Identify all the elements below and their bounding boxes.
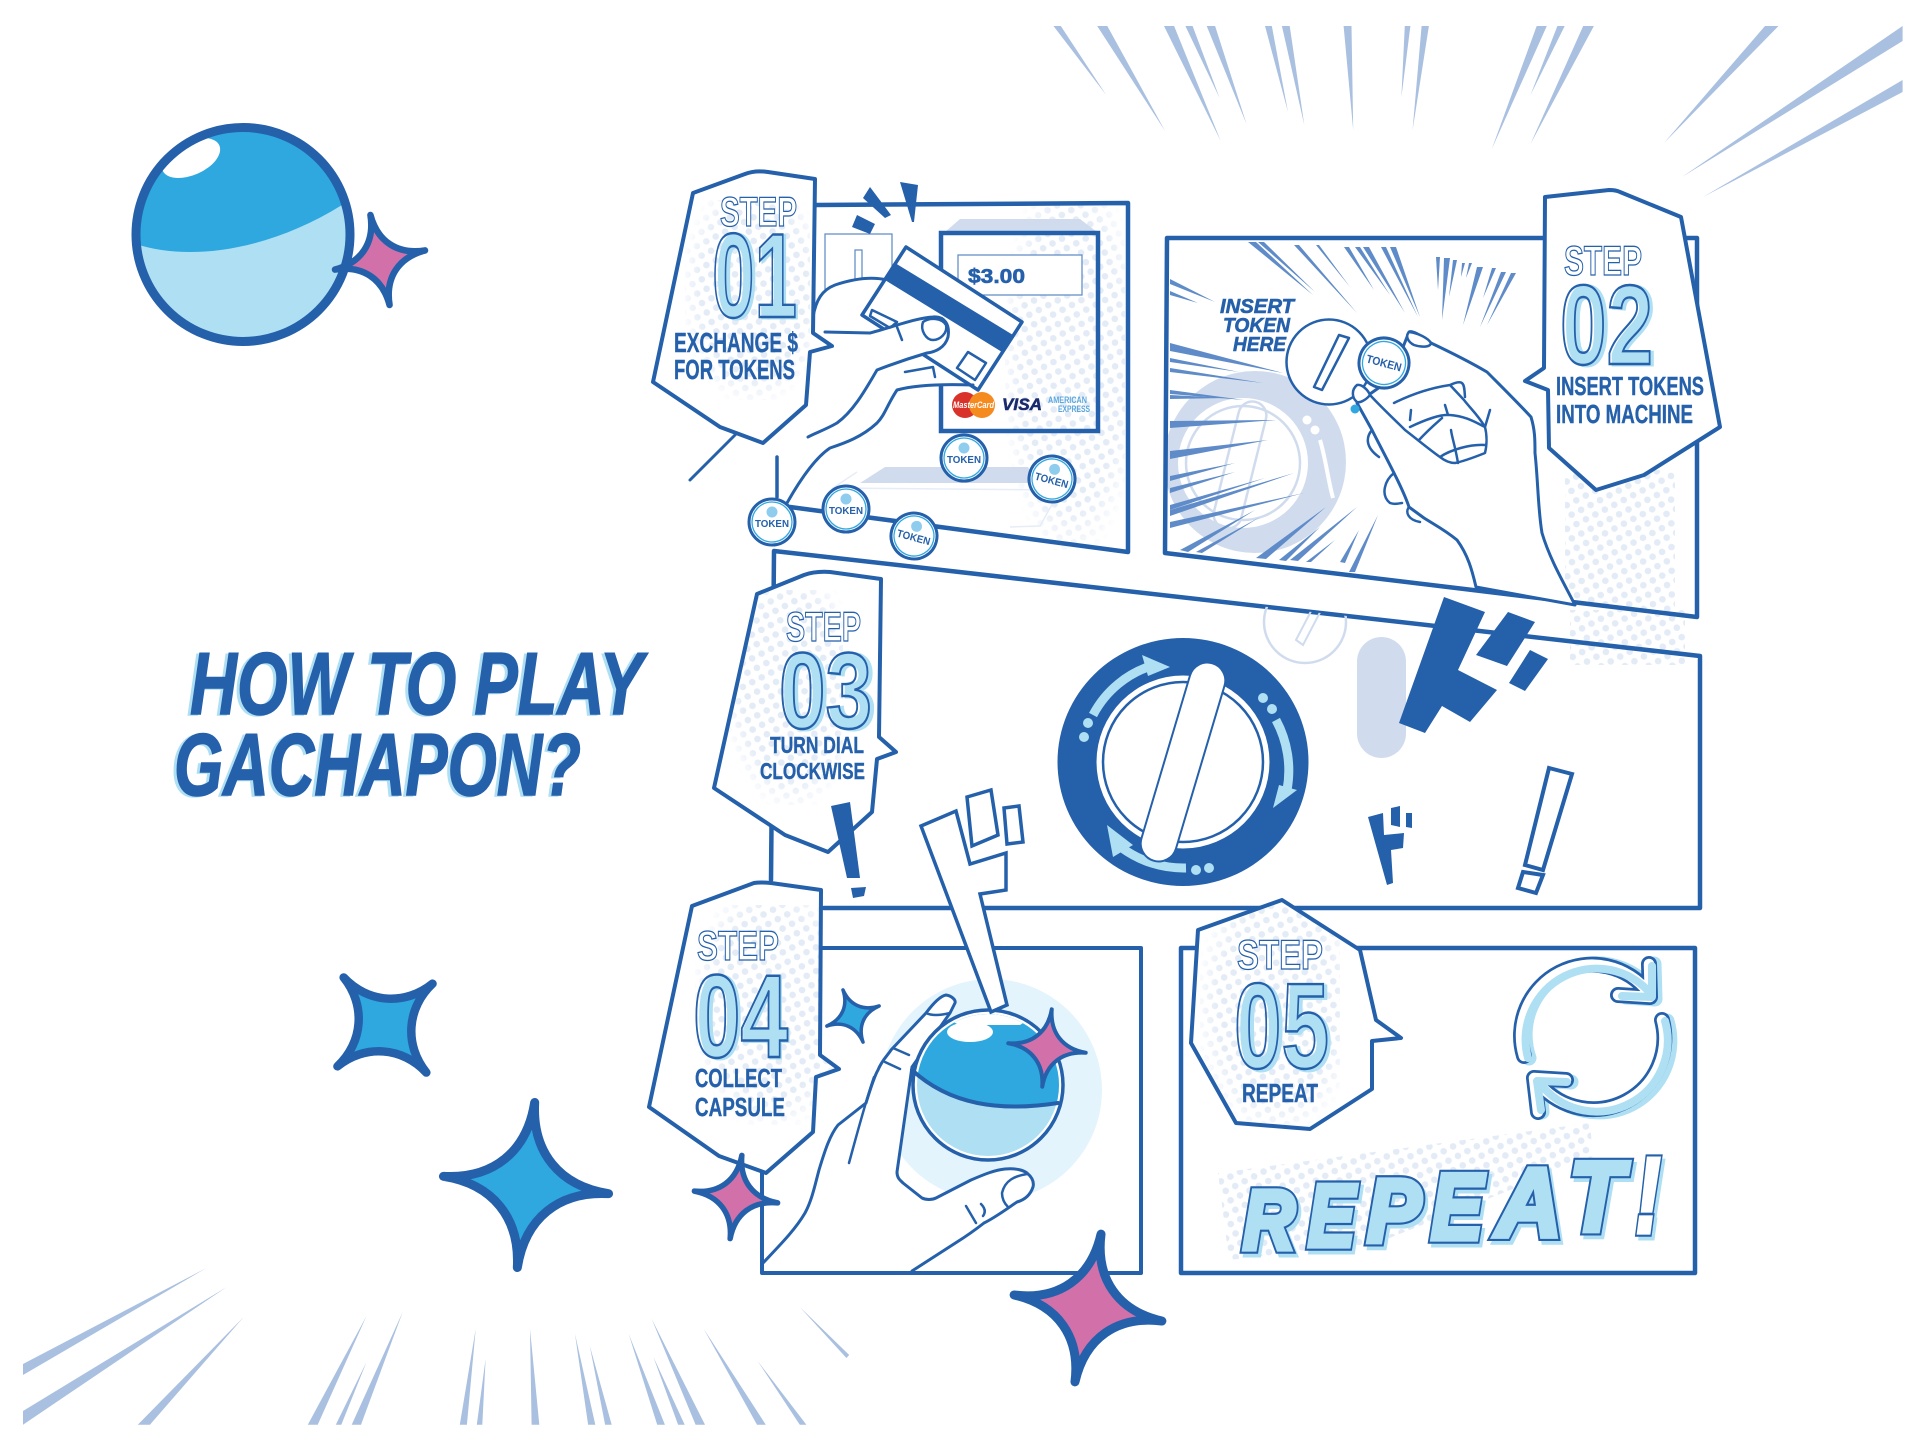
repeat headline: E (1431, 1154, 1486, 1259)
token: TOKEN (896, 528, 931, 548)
mastercard logo (952, 392, 995, 418)
step number: 05 (1234, 958, 1329, 1094)
large pink sparkle (1001, 1221, 1175, 1395)
capsule ball (136, 100, 350, 342)
cycle arrows (1521, 964, 1670, 1112)
repeat headline: R (1243, 1173, 1295, 1267)
repeat headline: A (1497, 1152, 1565, 1261)
step number: 02 (1564, 263, 1656, 389)
repeat headline: A (1494, 1148, 1562, 1257)
step caption: CLOCKWISE (760, 758, 865, 784)
speech bubble: step 02 (1525, 190, 1720, 490)
repeat headline: P (1370, 1166, 1425, 1266)
repeat headline: T (1569, 1141, 1630, 1252)
repeat headline: E (1308, 1166, 1357, 1265)
pale machine dial (1164, 371, 1346, 553)
thumb (808, 317, 948, 437)
free sparkles (296, 936, 1175, 1395)
card reader (825, 234, 892, 294)
title: HOW TO PLAY (187, 635, 645, 734)
impact marks (831, 182, 1572, 1012)
hand holding card (690, 247, 1022, 503)
speech bubble: step 01 (653, 171, 832, 443)
repeat headline: P (1367, 1162, 1422, 1262)
step caption: TURN DIAL (770, 732, 864, 758)
burst lines: top right (1054, 26, 1903, 197)
token: TOKEN (755, 518, 789, 530)
pale pill (1357, 637, 1406, 758)
speech bubble: step 05 (1191, 900, 1401, 1130)
frame (1165, 238, 1697, 617)
step number: 03 (782, 631, 876, 752)
token (941, 435, 987, 481)
dial handle (1136, 658, 1230, 866)
dial arrow right (1273, 720, 1297, 808)
speed lines (1170, 242, 1516, 572)
step caption (695, 1063, 785, 1122)
arrow bottom (1534, 1020, 1668, 1112)
tokens (749, 435, 1080, 564)
price box (958, 255, 1082, 295)
dial dots (1079, 693, 1277, 875)
title (171, 634, 648, 815)
capsule (910, 1008, 1065, 1162)
repeat headline: E (1434, 1158, 1489, 1263)
american express logo: AMERICAN (1048, 395, 1087, 405)
token (749, 499, 795, 545)
step label: STEP (697, 922, 779, 969)
dial (1058, 638, 1308, 886)
step caption: EXCHANGE $ (674, 327, 798, 358)
repeat headline: T (1572, 1145, 1633, 1256)
cyan sparkle (296, 936, 474, 1114)
token (886, 508, 942, 564)
repeat headline: E (1308, 1166, 1357, 1265)
repeat headline: E (1311, 1170, 1360, 1269)
panel: step 1 exchange for tokens (653, 171, 1128, 564)
step label: STEP (1564, 237, 1642, 284)
visa logo: VISA (1002, 395, 1042, 414)
small impact mark (1368, 806, 1412, 885)
token: TOKEN (1034, 471, 1069, 491)
step label: STEP (720, 188, 797, 235)
credit card (862, 247, 1022, 390)
token held: TOKEN (1365, 354, 1403, 374)
insert token here label: HERE (1233, 333, 1287, 356)
american express logo: EXPRESS (1058, 404, 1090, 414)
step caption: INTO MACHINE (1556, 399, 1693, 429)
step caption: CAPSULE (695, 1092, 785, 1122)
hand with token (1350, 332, 1575, 605)
frame (790, 203, 1128, 552)
step caption (1556, 371, 1704, 429)
dial arrow top left (1093, 655, 1170, 715)
step caption: FOR TOKENS (674, 354, 795, 385)
pink sparkle (1004, 1005, 1090, 1091)
repeat headline: A (1494, 1148, 1562, 1257)
capsule halo (880, 979, 1102, 1201)
step label: STEP (786, 603, 861, 650)
frame (762, 948, 1141, 1273)
burst lines: bottom left (23, 1268, 849, 1425)
step caption: INSERT TOKENS (1556, 371, 1704, 401)
token tray (833, 467, 1060, 527)
step caption: COLLECT (695, 1063, 782, 1093)
halftone (1005, 205, 1125, 550)
speech bubble: step 03 (714, 572, 896, 852)
repeat headline: R (1243, 1173, 1295, 1267)
small cyan sparkle (817, 980, 889, 1052)
outlined key-shaped mark (921, 790, 1023, 1012)
mastercard logo: MasterCard (953, 400, 994, 410)
hand with capsule (763, 995, 1033, 1271)
repeat headline: ! (1636, 1137, 1660, 1255)
top impact marks panel 1 (852, 182, 918, 234)
repeat headline: P (1367, 1162, 1422, 1262)
large impact mark (1399, 597, 1548, 733)
frame (771, 551, 1700, 908)
halftone (1570, 610, 1685, 665)
american express logo (1048, 395, 1090, 414)
capsule icon with sparkle (136, 100, 435, 342)
step caption: REPEAT (1242, 1078, 1318, 1108)
repeat headline (1243, 1137, 1663, 1271)
insert token here label: TOKEN (1223, 314, 1291, 337)
step number: 01 (712, 209, 797, 343)
title: GACHAPON? (171, 716, 578, 815)
panel: step 5 repeat (1181, 900, 1695, 1273)
step caption (674, 327, 798, 385)
ghost coin slot (1262, 606, 1348, 664)
token (1024, 451, 1080, 507)
machine screen (941, 219, 1098, 431)
outlined exclamation (1518, 768, 1572, 893)
repeat headline: R (1246, 1177, 1298, 1271)
arrow top (1521, 964, 1652, 1058)
solid exclamation (831, 802, 866, 898)
title: GACHAPON? (174, 715, 581, 814)
repeat headline: ! (1636, 1137, 1660, 1255)
large cyan sparkle (435, 1094, 617, 1276)
step number: 05 (1238, 960, 1332, 1096)
pink sparkle on bubble (689, 1150, 783, 1244)
halftone (1218, 1123, 1593, 1260)
step caption (760, 732, 865, 784)
insert token here label (1220, 295, 1295, 356)
dial arrow bottom (1107, 825, 1186, 868)
token: TOKEN (947, 454, 981, 466)
arrow shadow (1525, 964, 1670, 1112)
title: HOW TO PLAY (190, 634, 648, 733)
coin slot (1286, 320, 1372, 404)
step number: 03 (779, 630, 872, 751)
step number: 04 (693, 951, 788, 1083)
step number: 01 (716, 210, 799, 344)
step number (712, 209, 799, 344)
price: $3.00 (968, 266, 1025, 288)
insert token here label: INSERT (1220, 295, 1295, 318)
halftone (1565, 470, 1675, 616)
step label: STEP (1237, 931, 1323, 978)
panel: step 4 collect capsule (649, 882, 1141, 1273)
pink sparkle (325, 205, 435, 315)
step number: 02 (1560, 262, 1653, 388)
frame (1181, 948, 1695, 1273)
panel: step 3 turn dial (771, 551, 1700, 908)
repeat headline: ! (1639, 1141, 1663, 1259)
token (823, 486, 869, 532)
speech bubble: step 04 (649, 882, 839, 1173)
repeat headline: T (1569, 1141, 1630, 1252)
token held (1353, 332, 1415, 394)
panel: step 2 insert tokens (1164, 190, 1720, 617)
token: TOKEN (829, 505, 863, 517)
repeat headline: E (1431, 1154, 1486, 1259)
step number: 04 (697, 952, 789, 1084)
